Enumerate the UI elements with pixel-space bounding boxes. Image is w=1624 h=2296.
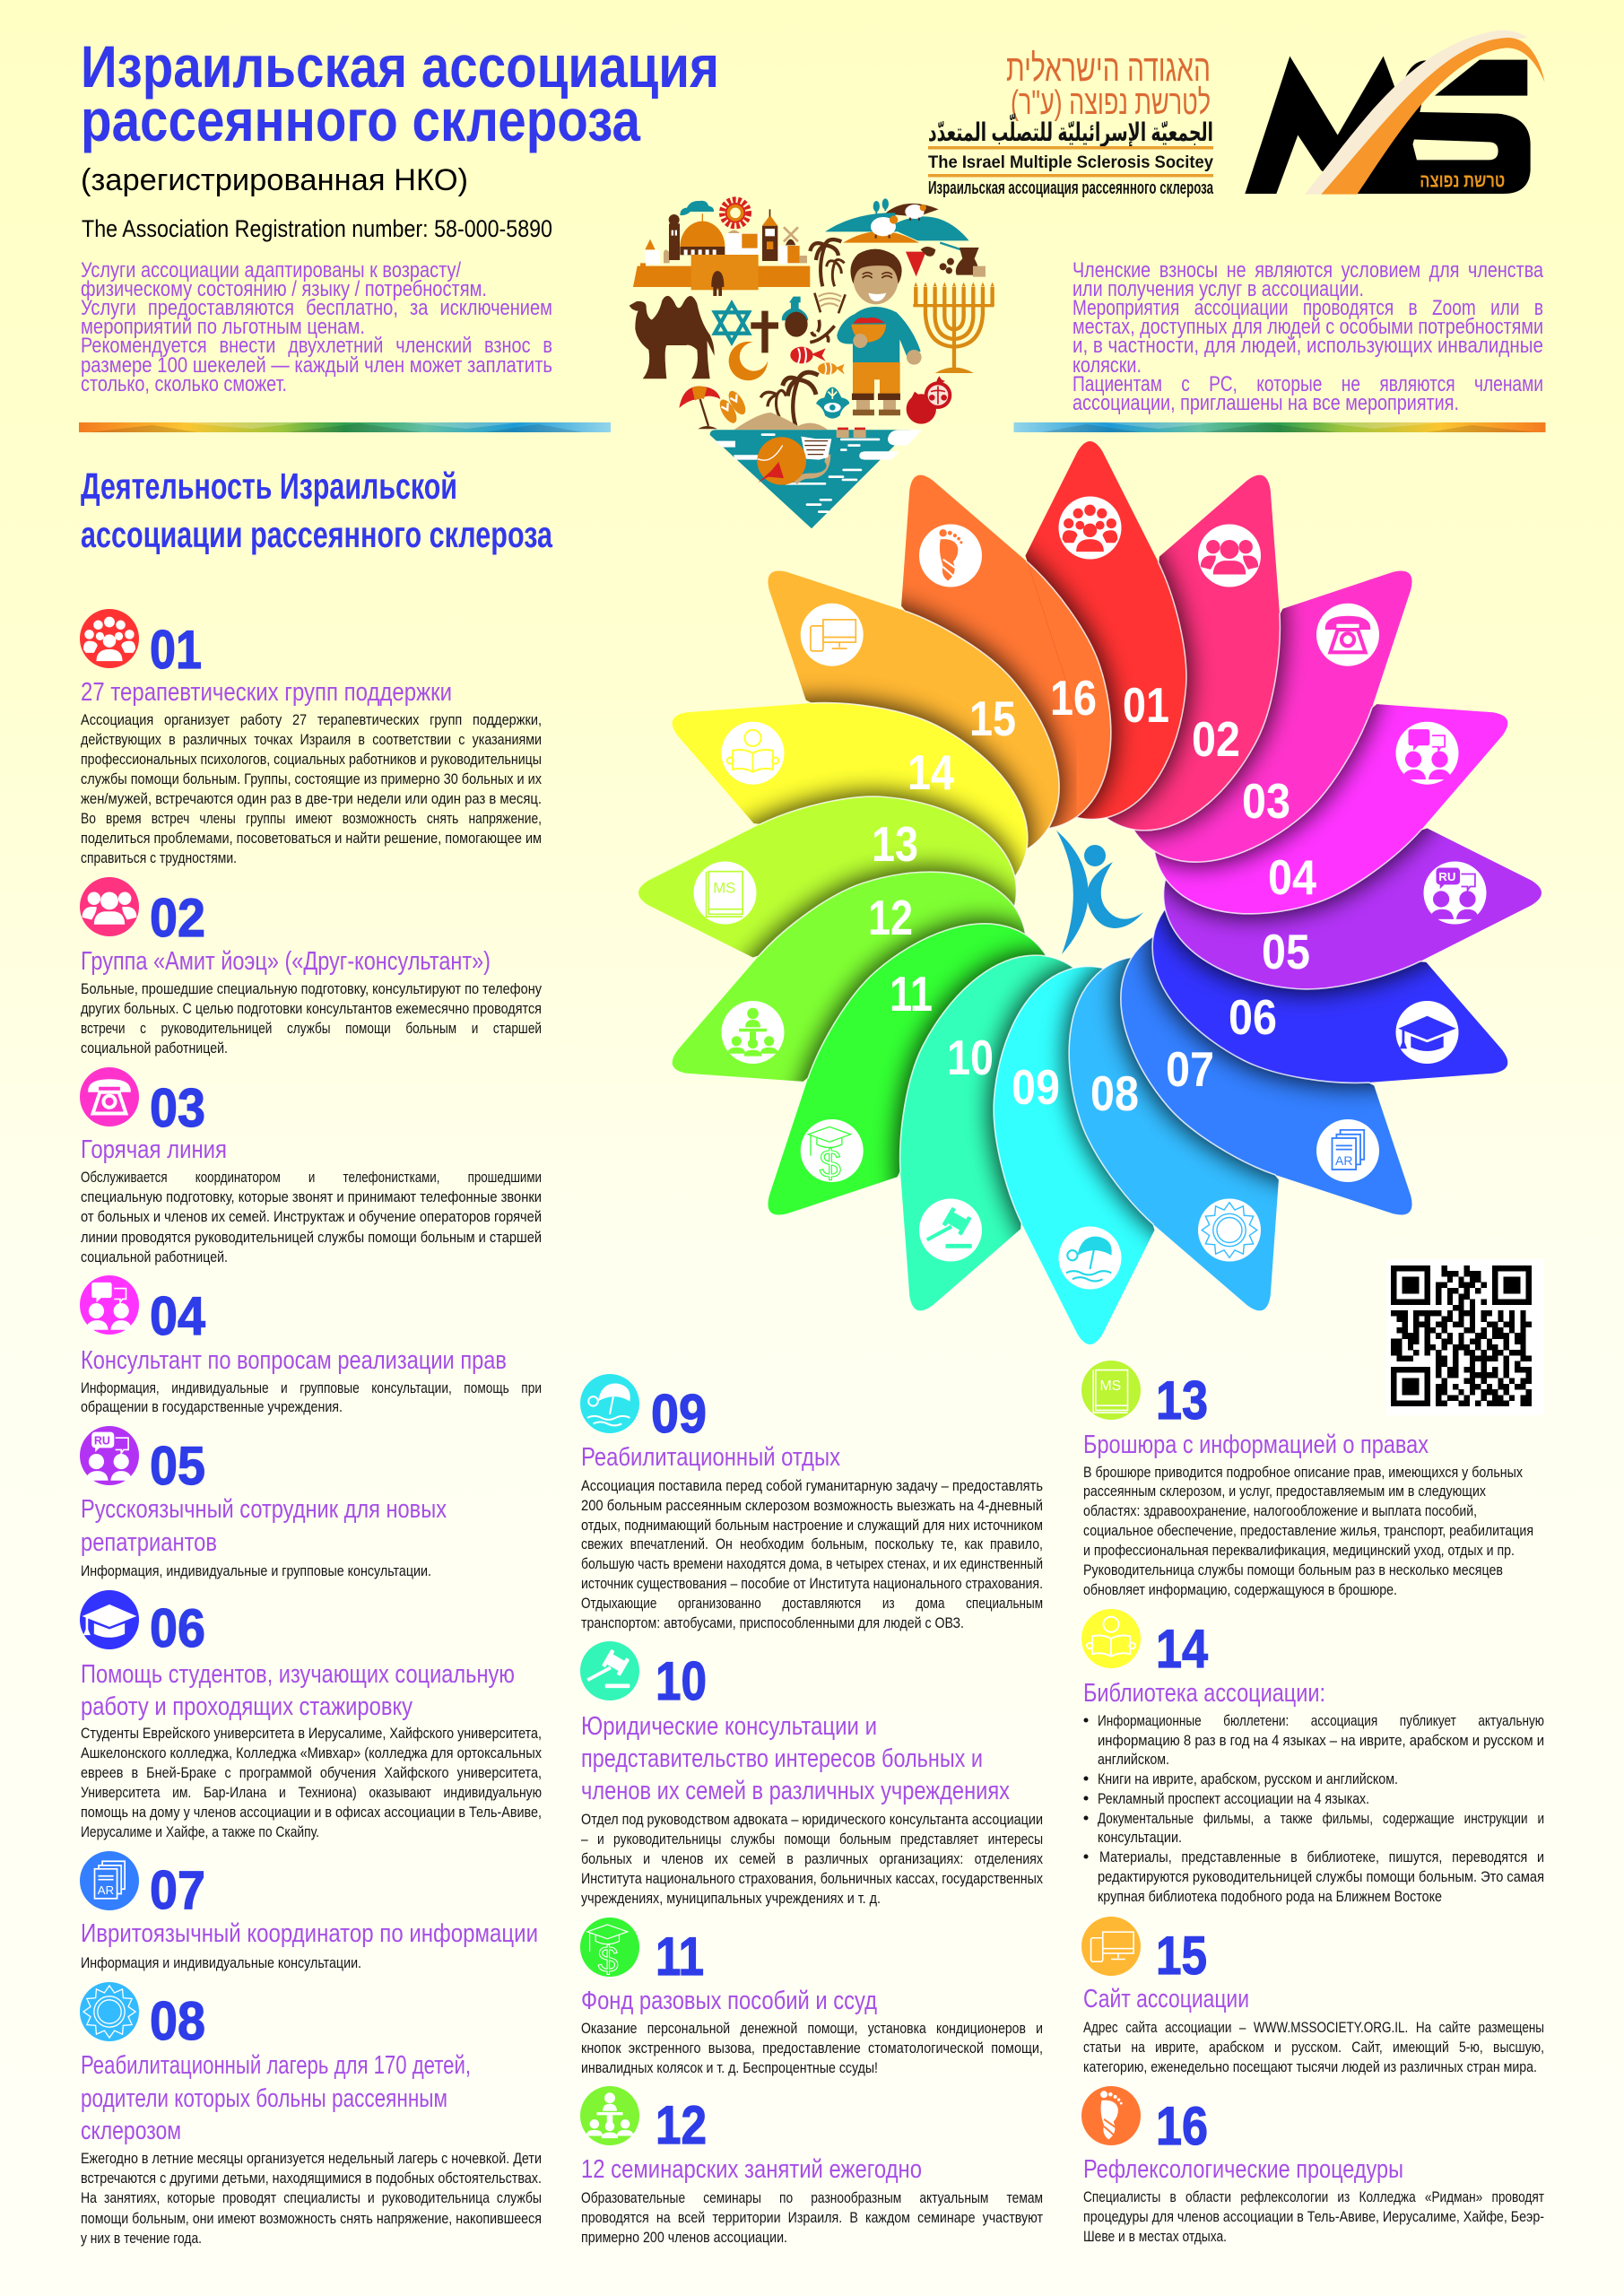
body 06: Университета им. Бар-Илана и Техниона) оказывают индивидуальную: [81, 1784, 542, 1801]
body 13: социальное обеспечение, предоставление жилья, транспорт, реабилитация: [1083, 1522, 1533, 1539]
body 01: жен/мужей, встречаются один раз в две-три недели или один раз в месяц.: [81, 790, 542, 807]
item 04: [80, 1275, 542, 1415]
body 06: евреев в Бней-Браке с программой обучения Хайфского университета,: [81, 1764, 542, 1781]
flower icons: [694, 497, 1487, 1290]
body 01: поделиться проблемами, посоветоваться и найти решение, помогающее им: [81, 830, 542, 847]
body 10: Института национального страхования, больничных кассах, государственных: [581, 1870, 1043, 1887]
beach scene: [710, 413, 922, 528]
fish: [790, 347, 845, 375]
heading 08: Реабилитационный лагерь для 170 детей,: [81, 2051, 471, 2080]
heading 16: Рефлексологические процедуры: [1083, 2155, 1403, 2184]
icon: russian speaker: [80, 1426, 139, 1485]
icon: seminar: [580, 2086, 639, 2145]
grapes and coffee: [906, 243, 986, 277]
icon: gavel: [580, 1641, 639, 1700]
bulleted list 14: консультации.: [1098, 1829, 1182, 1846]
heading 06: [81, 1660, 515, 1721]
intro text right: и, в частности, для людей, использующих инвалидные: [1073, 334, 1543, 358]
body 12: примерно 200 членов ассоциации.: [581, 2229, 787, 2246]
body 16: [1083, 2188, 1544, 2245]
bulleted list 14: редактируются руководительницей службы помощи больным. Это самая: [1098, 1868, 1544, 1885]
flower numbers: 05: [1262, 924, 1310, 979]
body 09: свежих впечатлений. Он необходим больным, поскольку те, как правило,: [581, 1535, 1043, 1552]
number 03: 03: [150, 1078, 205, 1138]
icon: documents: [80, 1851, 139, 1910]
body 11: Оказание персональной денежной помощи, установка кондиционеров и: [581, 2020, 1043, 2037]
body 06: помощь на дому у членов ассоциации и в офисах ассоциации в Тель-Авиве,: [81, 1804, 542, 1821]
petal 15: [768, 570, 1060, 850]
flower numbers: 10: [947, 1030, 994, 1085]
heading 15: Сайт ассоциации: [1083, 1985, 1249, 2013]
flower numbers: 14: [908, 744, 954, 800]
flower numbers: [868, 670, 1316, 1121]
petal 07: [1120, 936, 1412, 1214]
association wordmark: האגודה הישראלית: [1006, 47, 1211, 89]
bulleted list 14: крупная библиотека подобного рода на Ближнем Востоке: [1098, 1888, 1442, 1905]
body 09: 200 больным рассеянным склерозом возможность выезжать на 4-дневный: [581, 1497, 1043, 1514]
body 09: источник существования – пособие от Института национального страхования.: [581, 1575, 1043, 1592]
number 02: 02: [150, 888, 205, 948]
petal 16: [901, 475, 1076, 829]
flower numbers: 13: [872, 816, 918, 872]
petal 13: [638, 796, 1017, 958]
body 09: Ассоциация поставила перед собой гуманитарную задачу – предоставлять: [581, 1477, 1043, 1494]
icon: fund: [580, 1918, 639, 1980]
icon: telephone: [80, 1067, 139, 1126]
religious symbols: [715, 303, 778, 380]
body 06: Иерусалиме и Хайфе, а также по Скайпу.: [81, 1823, 319, 1840]
item 06: [80, 1590, 542, 1840]
intro text left: Услуги ассоциации адаптированы к возрасту/: [81, 258, 461, 283]
flower chart: [582, 385, 1598, 1401]
body 06: Студенты Еврейского университета в Иерусалиме, Хайфского университета,: [81, 1725, 542, 1742]
flower numbers: 02: [1192, 711, 1240, 767]
number 05: 05: [150, 1436, 205, 1496]
flower numbers: 11: [890, 966, 933, 1022]
association wordmark: לטרשת נפוצה (ע"ר): [1011, 84, 1211, 122]
body 12: Образовательные семинары по разнообразным актуальным темам: [581, 2189, 1043, 2206]
body 11: инвалидных колясок и т. д. Беспроцентные ссуды!: [581, 2059, 878, 2076]
section heading: ассоциации рассеянного склероза: [81, 514, 553, 555]
body 12: [581, 2189, 1043, 2246]
item 02: [80, 877, 542, 1057]
flower numbers: 04: [1268, 849, 1316, 905]
body 01: действующих в различных точках Израиля в соответствии с указаниями: [81, 731, 542, 748]
intro text right: или получения услуг в ассоциации.: [1073, 277, 1364, 301]
bulleted list 14: [1083, 1712, 1544, 1905]
heading 02: Группа «Амит йоэц» («Друг-консультант»): [81, 947, 491, 976]
intro text left: физическому состоянию / языку / потребностям.: [81, 277, 487, 301]
item 13: [1081, 1361, 1533, 1598]
sun and cloud: [680, 200, 749, 226]
subtitle: (зарегистрированная НКО): [81, 163, 468, 197]
number 15: 15: [1156, 1926, 1207, 1986]
number 06: 06: [150, 1598, 205, 1658]
heading 06: Помощь студентов, изучающих социальную: [81, 1660, 515, 1689]
flower numbers: 12: [868, 890, 913, 945]
title: [81, 33, 719, 153]
icon: foot: [1081, 2086, 1141, 2145]
heading 10: представительство интересов больных и: [581, 1744, 983, 1773]
body 10: больных и членов их семей в различных организациях: отделениях: [581, 1850, 1043, 1867]
title: Израильская ассоциация: [81, 33, 719, 100]
association wordmark: الجمعيّة الإسرائيليّة للتصلّب المتعدّد: [928, 113, 1213, 147]
heading 04: Консультант по вопросам реализации прав: [81, 1346, 507, 1375]
body 16: процедуры для членов ассоциации в Тель-Авиве, Иерусалиме, Хайфе, Беэр-: [1083, 2208, 1544, 2225]
intro text left: Рекомендуется внести двухлетний членский взнос в: [81, 334, 552, 358]
heading 05: Русскоязычный сотрудник для новых: [81, 1495, 447, 1524]
body 01: Ассоциация организует работу 27 терапевтических групп поддержки,: [81, 711, 542, 728]
bulleted list 14: Материалы, представленные в библиотеке, пишутся, переводятся и: [1099, 1848, 1544, 1866]
body 15: категорию, еженедельно посещают тысячи людей из различных стран мира.: [1083, 2058, 1537, 2075]
item 12: [580, 2086, 1043, 2246]
heading 08: склерозом: [81, 2117, 181, 2145]
intro text left: столько, сколько сможет.: [81, 372, 287, 396]
heading 08: [81, 2051, 471, 2145]
icon: devices: [1081, 1917, 1141, 1976]
body 01: службы помощи больным. Группы, состоящие из примерно 30 больных и их: [81, 770, 542, 787]
bulleted list 14: Книги на иврите, арабском, русском и английском.: [1098, 1770, 1398, 1787]
intro text left: размере 100 шекелей — каждый член может заплатить: [81, 353, 552, 378]
body 02: встречи с руководительницей службы помощи больным и старшей: [81, 1020, 542, 1037]
heading 11: Фонд разовых пособий и ссуд: [581, 1987, 877, 2015]
body 03: [81, 1169, 542, 1265]
number 07: 07: [150, 1860, 205, 1920]
boy: [837, 249, 922, 415]
body 11: кнопок экстренного вызова, предоставление стоматологической помощи,: [581, 2039, 1043, 2057]
body 07: Информация и индивидуальные консультации.: [81, 1954, 361, 1971]
body 08: помощи больным, они имеют возможность снять напряжение, накопившееся: [81, 2210, 542, 2227]
petal 12: [673, 871, 1026, 1082]
item 03: [80, 1067, 542, 1265]
body 06: [81, 1725, 542, 1840]
body 03: от больных и членов их семей. Инструктаж и обучение операторов горячей: [81, 1208, 542, 1225]
intro text right: [1073, 258, 1544, 415]
body 04: Информация, индивидуальные и групповые консультации, помощь при: [81, 1379, 542, 1396]
body 09: большую часть времени находятся дома, в четырех стенах, и их единственный: [581, 1555, 1043, 1572]
petal 03: [1133, 570, 1412, 863]
body 13: Руководительница службы помощи больным раз в несколько месяцев: [1083, 1561, 1503, 1578]
body 13: областях: здравоохранение, налогообложение и выплата пособий,: [1083, 1502, 1477, 1519]
item 08: [80, 1982, 542, 2247]
bulleted list 14: английском.: [1098, 1751, 1169, 1768]
flower numbers: 16: [1050, 670, 1097, 726]
heading 07: Ивритоязычный координатор по информации: [81, 1919, 538, 1948]
icon: sun: [80, 1982, 139, 2041]
heart illustration: [630, 198, 994, 528]
body 04: [81, 1379, 542, 1415]
intro text left: мероприятий по льготным ценам.: [81, 315, 365, 339]
number 11: 11: [656, 1926, 704, 1987]
item 09: [580, 1374, 1043, 1631]
icon: graduation cap: [80, 1590, 139, 1649]
heading 13: Брошюра с информацией о правах: [1083, 1431, 1429, 1459]
petal 14: [673, 701, 1029, 877]
body 02: [81, 980, 542, 1057]
MS logo: [1245, 30, 1545, 195]
heading 10: Юридические консультации и: [581, 1712, 877, 1741]
intro text left: Услуги предоставляются бесплатно, за исключением: [81, 296, 552, 320]
heading 12: 12 семинарских занятий ежегодно: [581, 2155, 922, 2184]
hills and sheep: [825, 198, 969, 243]
QR code: [1386, 1259, 1544, 1415]
heading 09: Реабилитационный отдых: [581, 1443, 840, 1472]
body 06: Ашкелонского колледжа, Колледжа «Мивхар» (колледжа для ортоксальных: [81, 1744, 542, 1761]
heading 06: работу и проходящих стажировку: [81, 1692, 413, 1721]
heading 05: репатриантов: [81, 1528, 217, 1557]
item 05: [80, 1426, 447, 1579]
intro text left: [81, 258, 552, 396]
body 13: обновляет информацию, содержащуюся в брошюре.: [1083, 1581, 1397, 1598]
body 09: [581, 1477, 1043, 1631]
body 10: учреждениях, муниципальных учреждениях и т. д.: [581, 1890, 881, 1907]
petal 10: [899, 954, 1074, 1311]
body 13: В брошюре приводится подробное описание прав, имеющихся у больных: [1083, 1464, 1523, 1481]
icon: support groups: [80, 609, 139, 668]
jug, scroll, olive: [782, 293, 846, 343]
petal 11: [768, 923, 1046, 1214]
body 10: Отдел под руководством адвоката – юридического консультанта ассоциации: [581, 1811, 1043, 1828]
body 01: профессиональных психологов, социальных работников и руководительницы: [81, 751, 542, 768]
item 16: [1081, 2086, 1544, 2245]
body 02: социальной работницей.: [81, 1039, 228, 1057]
item 11: [580, 1918, 1043, 2076]
heading 03: Горячая линия: [81, 1135, 227, 1164]
body 09: Отдыхающие организованно доставляются из дома специальным: [581, 1595, 1043, 1612]
icon: reader: [1081, 1609, 1141, 1668]
petal 01: [1026, 441, 1187, 820]
registration number: The Association Registration number: 58-000-5890: [82, 215, 552, 242]
number 10: 10: [656, 1651, 707, 1711]
flower numbers: 03: [1242, 773, 1290, 829]
menorah: [913, 283, 994, 373]
bulleted list 14: Рекламный проспект ассоциации на 4 языках.: [1098, 1790, 1369, 1807]
heading 10: членов их семей в различных учреждениях: [581, 1777, 1010, 1805]
icon: beach umbrella: [580, 1374, 639, 1433]
body 03: Обслуживается координатором и телефонистками, прошедшими: [81, 1169, 542, 1186]
body 13: и профессиональная переквалификация, медицинский уход, отдых и пр.: [1083, 1542, 1515, 1559]
hamsa: [816, 387, 849, 419]
item 10: [580, 1641, 1043, 1907]
body 10: [581, 1811, 1043, 1907]
number 09: 09: [651, 1384, 707, 1444]
heading 08: родители которых больны рассеянным: [81, 2084, 447, 2113]
body 09: транспортом: автобусами, приспособленными для людей с ОВЗ.: [581, 1614, 964, 1631]
icon: peer consultants: [80, 877, 139, 936]
body 11: [581, 2020, 1043, 2076]
number 01: 01: [150, 620, 202, 680]
palm trees: [760, 239, 845, 426]
body 16: Шеве и в местах отдыха.: [1083, 2228, 1227, 2245]
camel: [630, 296, 715, 378]
umbrella and sandals: [679, 386, 751, 429]
petal 09: [993, 965, 1155, 1344]
body 08: Ежегодно в летние месяцы организуется недельный лагерь с ночевкой. Дети: [81, 2150, 542, 2167]
icon: rights consultant: [80, 1275, 139, 1335]
item 14: [1081, 1609, 1544, 1905]
body 13: рассеянным склерозом, и услуг, предоставляемым им в следующих: [1083, 1483, 1486, 1500]
item 01: [80, 609, 542, 866]
intro text right: коляски.: [1073, 353, 1142, 378]
item 07: [80, 1851, 538, 1971]
number 12: 12: [656, 2095, 707, 2155]
city wall and skyline: [633, 209, 810, 296]
petal 06: [1151, 909, 1508, 1083]
association wordmark: Израильская ассоциация рассеянного склероза: [928, 178, 1214, 198]
title: рассеянного склероза: [81, 87, 641, 153]
flower numbers: 01: [1123, 677, 1169, 733]
body 05: Информация, индивидуальные и групповые консультации.: [81, 1562, 431, 1579]
body 01: Во время встреч члены группы имеют возможность снять напряжение,: [81, 810, 542, 827]
number 16: 16: [1156, 2096, 1208, 2156]
petal 04: [1153, 704, 1508, 915]
body 10: – и руководительницы службы помощи больным представляет интересы: [581, 1831, 1043, 1848]
central figure logo: [1056, 831, 1143, 954]
association wordmark: [928, 47, 1214, 198]
section heading: [81, 465, 553, 555]
heading 01: 27 терапевтических групп поддержки: [81, 678, 452, 707]
number 04: 04: [150, 1286, 206, 1346]
heading 10: [581, 1712, 1010, 1805]
body 08: встречаются с другими детьми, находящимися в подобных обстоятельствах.: [81, 2170, 542, 2187]
body 08: у них в течение года.: [81, 2230, 202, 2247]
flower numbers: 06: [1229, 989, 1277, 1045]
petal 08: [1068, 956, 1279, 1311]
body 03: социальной работницей.: [81, 1248, 228, 1265]
body 01: [81, 711, 542, 866]
body 01: справиться с трудностями.: [81, 849, 237, 866]
rainbow bar left: [79, 422, 611, 432]
petal 05: [1162, 829, 1541, 990]
body 03: специальную подготовку, которые звонят и принимают телефонные звонки: [81, 1188, 542, 1205]
flower numbers: 07: [1166, 1041, 1214, 1097]
body 12: проводятся на всей территории Израиля. В каждом семинаре участвуют: [581, 2209, 1043, 2226]
body 02: Больные, прошедшие специальную подготовку, консультируют по телефону: [81, 980, 542, 997]
heading 05: [81, 1495, 447, 1557]
flower numbers: 15: [969, 691, 1016, 746]
body 03: линии проводятся руководительницей службы помощи больным и старшей: [81, 1229, 542, 1246]
body 13: [1083, 1464, 1533, 1598]
body 09: отдых, поднимающий больным настроение и служащий для них источником: [581, 1517, 1043, 1534]
body 08: На занятиях, которые проводят специалисты и руководительница службы: [81, 2189, 542, 2206]
body 08: [81, 2150, 542, 2247]
number 08: 08: [150, 1991, 205, 2051]
icon: brochure: [1081, 1361, 1141, 1420]
bulleted list 14: информацию 8 раз в год на 4 языках – на иврите, арабском и русском и: [1098, 1732, 1544, 1749]
item 15: [1081, 1917, 1544, 2075]
flower numbers: 08: [1090, 1065, 1139, 1121]
pomegranate: [907, 376, 951, 424]
body 04: обращении в государственные учреждения.: [81, 1398, 343, 1415]
heading 14: Библиотека ассоциации:: [1083, 1679, 1325, 1708]
MS logo: טרשת נפוצה: [1420, 170, 1505, 191]
number 13: 13: [1156, 1370, 1208, 1431]
section heading: Деятельность Израильской: [81, 465, 457, 507]
association wordmark: The Israel Multiple Sclerosis Socitey: [928, 153, 1213, 172]
petal 02: [1107, 475, 1281, 831]
body 15: [1083, 2019, 1544, 2075]
flower numbers: 09: [1012, 1059, 1060, 1115]
rainbow bar right: [1013, 422, 1546, 432]
body 02: других больных. С целью подготовки консультантов ежемесячно проводятся: [81, 1000, 542, 1017]
number 14: 14: [1156, 1619, 1209, 1679]
intro text right: ассоциации, приглашены на все мероприятия.: [1073, 391, 1459, 415]
